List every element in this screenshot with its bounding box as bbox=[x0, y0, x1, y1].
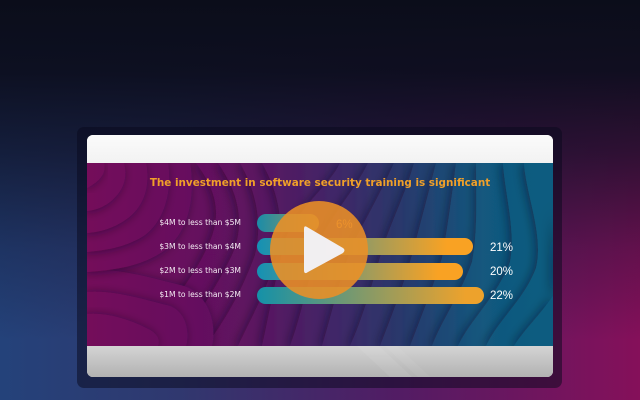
slide card bbox=[87, 135, 553, 377]
chart title: The investment in software security training is significant bbox=[150, 177, 490, 189]
video frame bbox=[77, 127, 562, 388]
bar: 22% bbox=[257, 287, 484, 304]
value: 22%: 22% bbox=[490, 290, 513, 302]
bar: 20% bbox=[257, 263, 463, 280]
wavy chart background bbox=[87, 163, 553, 346]
bar: 6% bbox=[257, 214, 319, 232]
value: 20%: 20% bbox=[490, 266, 513, 278]
row label: $3M to less than $4M: $3M to less than $4M bbox=[159, 242, 241, 251]
bar: 21% bbox=[257, 238, 473, 255]
row label: $2M to less than $3M: $2M to less than $3M bbox=[159, 266, 241, 275]
row label: $4M to less than $5M: $4M to less than $5M bbox=[159, 218, 241, 227]
icon: play triangle bbox=[304, 226, 344, 273]
diagonal sheen bbox=[87, 346, 553, 377]
play button bbox=[270, 201, 368, 299]
value: 21%: 21% bbox=[490, 242, 513, 254]
row label: $1M to less than $2M: $1M to less than $2M bbox=[159, 290, 241, 299]
bottom grey strip bbox=[87, 346, 553, 377]
white header strip bbox=[87, 135, 553, 163]
value: 6%: 6% bbox=[336, 219, 353, 231]
